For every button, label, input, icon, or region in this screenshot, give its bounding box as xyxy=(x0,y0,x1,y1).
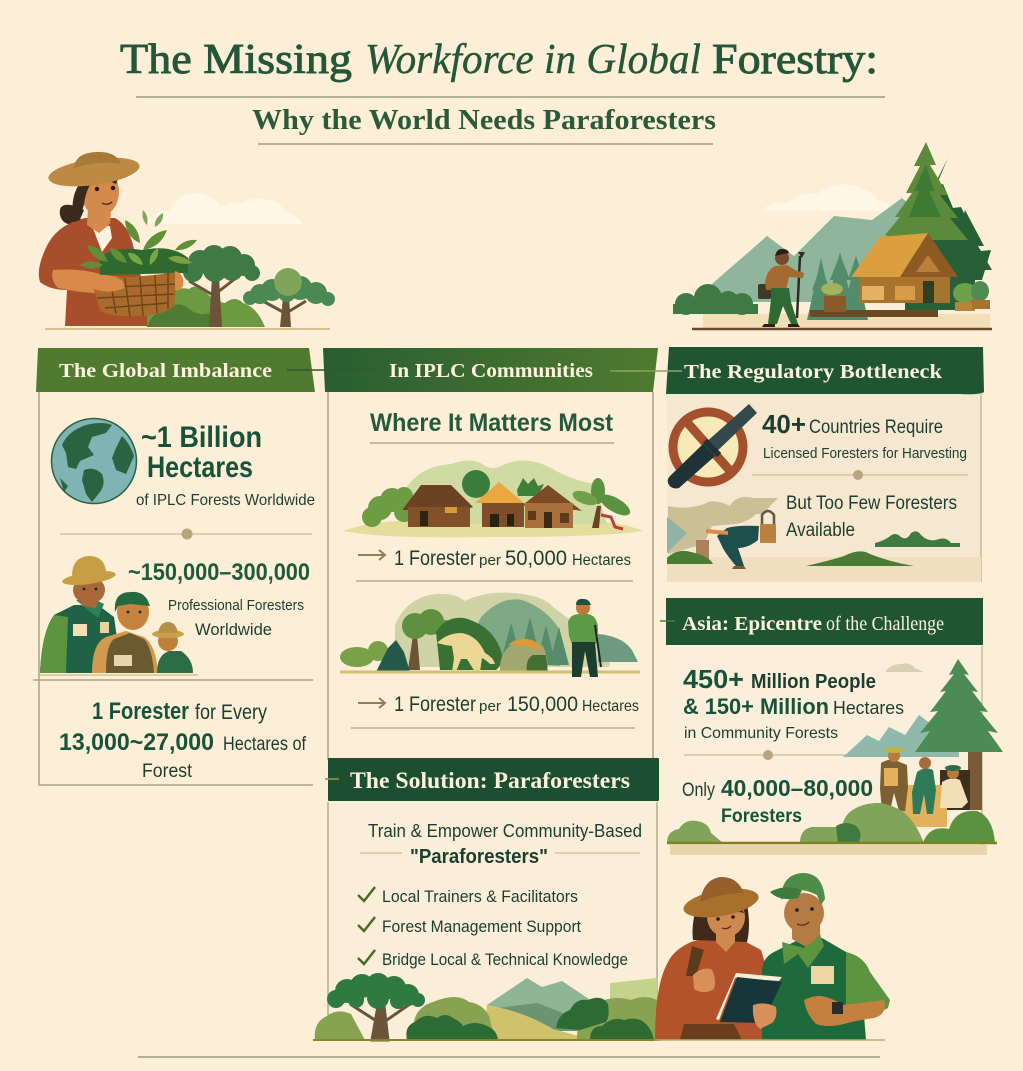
text: train and empower: "Paraforesters" xyxy=(410,846,548,868)
woman xyxy=(655,877,769,1040)
stat: only 40,000-80,000 foresters: Foresters xyxy=(721,806,802,827)
panel: the global imbalance xyxy=(33,348,315,785)
forester figure xyxy=(568,599,601,677)
text: train and empower: Train & Empower Community-Based xyxy=(368,821,642,841)
woman xyxy=(39,152,147,326)
hiker xyxy=(758,249,805,327)
checklist: Forest Management Support xyxy=(382,918,581,936)
spruce trees xyxy=(885,142,992,310)
icon: globe xyxy=(52,418,136,504)
icon: no chainsaw xyxy=(668,404,757,488)
illustration: map, padlock and worker xyxy=(667,497,960,569)
panel: the regulatory bottleneck xyxy=(666,347,984,582)
stat: forester per 50,000 hectares: 50,000 xyxy=(505,547,567,570)
text: too few foresters: Available xyxy=(786,520,855,541)
title: Forestry: xyxy=(712,37,878,83)
illustration: tree, mountains and field team xyxy=(667,659,1003,843)
header: asia: Asia: Epicentre xyxy=(682,613,822,635)
cabin xyxy=(810,233,958,317)
stat: people and hectares: in Community Forests xyxy=(684,725,838,742)
checklist: Local Trainers & Facilitators xyxy=(382,888,578,906)
panel: the solution xyxy=(313,758,660,1042)
panel: asia xyxy=(666,598,1003,855)
subtitle: Why the World Needs Paraforesters xyxy=(252,105,716,136)
house 3 xyxy=(524,485,582,528)
text: train and empower xyxy=(368,821,642,868)
illustration: village xyxy=(343,460,643,537)
header: the solution xyxy=(325,758,659,801)
stat: only 40,000-80,000 foresters: Only xyxy=(682,780,715,801)
header: asia xyxy=(666,598,983,645)
stat: 40+ countries: Licensed Foresters for Harvesting xyxy=(763,445,967,462)
stat: forester ratio: 1 Forester xyxy=(92,698,189,725)
book xyxy=(716,973,782,1029)
stat: 40+ countries: 40+ xyxy=(762,409,806,439)
stat: one billion hectares: Hectares xyxy=(147,451,253,484)
checklist: Bridge Local & Technical Knowledge xyxy=(382,951,628,969)
stat: forester ratio: for Every xyxy=(195,701,267,724)
stat: forester per 50,000 hectares: Hectares xyxy=(572,552,631,569)
stat: professional foresters: Worldwide xyxy=(195,620,272,639)
stat: professional foresters: Professional Foresters xyxy=(168,597,304,614)
big forester xyxy=(40,556,122,673)
stat: only 40,000-80,000 foresters xyxy=(682,775,873,827)
stat: forester ratio xyxy=(59,698,307,782)
text: too few foresters: But Too Few Foresters xyxy=(786,493,957,514)
illustration: cabin, mountains and hiker xyxy=(673,142,992,329)
arrow xyxy=(358,550,385,560)
stat: one billion hectares: ~1 Billion xyxy=(141,421,262,454)
padlock xyxy=(760,511,776,543)
house 1 xyxy=(403,485,473,527)
stat: one billion hectares: of IPLC Forests Worldwide xyxy=(136,492,315,509)
stat: 40+ countries xyxy=(762,409,967,462)
stat: forester per 150,000 hectares: 150,000 xyxy=(507,693,578,716)
header: asia: of the Challenge xyxy=(826,613,944,635)
illustration: forester pair with book xyxy=(655,873,890,1040)
stat: professional foresters: ~150,000–300,000 xyxy=(128,559,310,586)
stat: forester per 50,000 hectares xyxy=(394,547,631,570)
stat: forester per 150,000 hectares: Hectares xyxy=(582,698,639,715)
illustration: woman with basket and trees xyxy=(39,152,335,329)
stat: people and hectares: & 150+ Million xyxy=(683,694,829,719)
checklist xyxy=(358,887,628,969)
connector lines xyxy=(287,370,682,621)
header: the regulatory bottleneck: The Regulatory Bottleneck xyxy=(684,361,943,383)
illustration: forest landscape xyxy=(313,973,660,1040)
stat: forester per 150,000 hectares xyxy=(394,693,639,716)
small forester xyxy=(152,622,193,673)
stat: one billion hectares xyxy=(136,421,315,509)
header: in IPLC communities: In IPLC Communities xyxy=(389,360,593,382)
heading: where it matters most: Where It Matters Most xyxy=(370,409,614,437)
stat: people and hectares xyxy=(683,664,904,742)
text: too few foresters xyxy=(786,493,957,541)
stat: only 40,000-80,000 foresters: 40,000–80,000 xyxy=(721,775,873,801)
tree 2 xyxy=(243,268,335,327)
stat: professional foresters xyxy=(128,559,310,639)
title: Workforce in Global xyxy=(365,37,701,83)
stat: forester ratio: Hectares of xyxy=(223,734,307,755)
stat: 40+ countries: Countries Require xyxy=(809,417,943,438)
stat: forester per 50,000 hectares: per xyxy=(479,552,501,569)
house 2 xyxy=(475,482,524,527)
header: the global imbalance: The Global Imbalance xyxy=(59,360,272,382)
basket of leaves xyxy=(80,210,197,317)
tree 1 xyxy=(183,245,260,327)
header: the regulatory bottleneck xyxy=(666,347,984,394)
stat: forester per 150,000 hectares: per xyxy=(479,698,501,715)
stat: people and hectares: Hectares xyxy=(833,698,904,718)
stat: forester ratio: Forest xyxy=(142,761,193,782)
panel: in IPLC communities xyxy=(323,348,658,760)
header: in IPLC communities xyxy=(323,348,658,392)
man xyxy=(762,873,890,1040)
title xyxy=(120,37,878,83)
arrow xyxy=(358,698,385,708)
kneeling worker xyxy=(706,526,759,569)
stat: forester ratio: 13,000~27,000 xyxy=(59,729,214,756)
stat: forester per 150,000 hectares: 1 Forester xyxy=(394,693,476,716)
team members xyxy=(880,747,968,814)
stat: forester per 50,000 hectares: 1 Forester xyxy=(394,547,476,570)
header: the solution: The Solution: Paraforesters xyxy=(350,768,630,793)
header: the global imbalance xyxy=(36,348,315,392)
stat: people and hectares: 450+ xyxy=(683,664,744,694)
middle forester xyxy=(92,592,158,673)
illustration: forest and forester xyxy=(340,593,640,677)
stat: people and hectares: Million People xyxy=(751,671,876,693)
title: The Missing xyxy=(120,37,352,83)
illustration: three foresters xyxy=(40,556,198,675)
